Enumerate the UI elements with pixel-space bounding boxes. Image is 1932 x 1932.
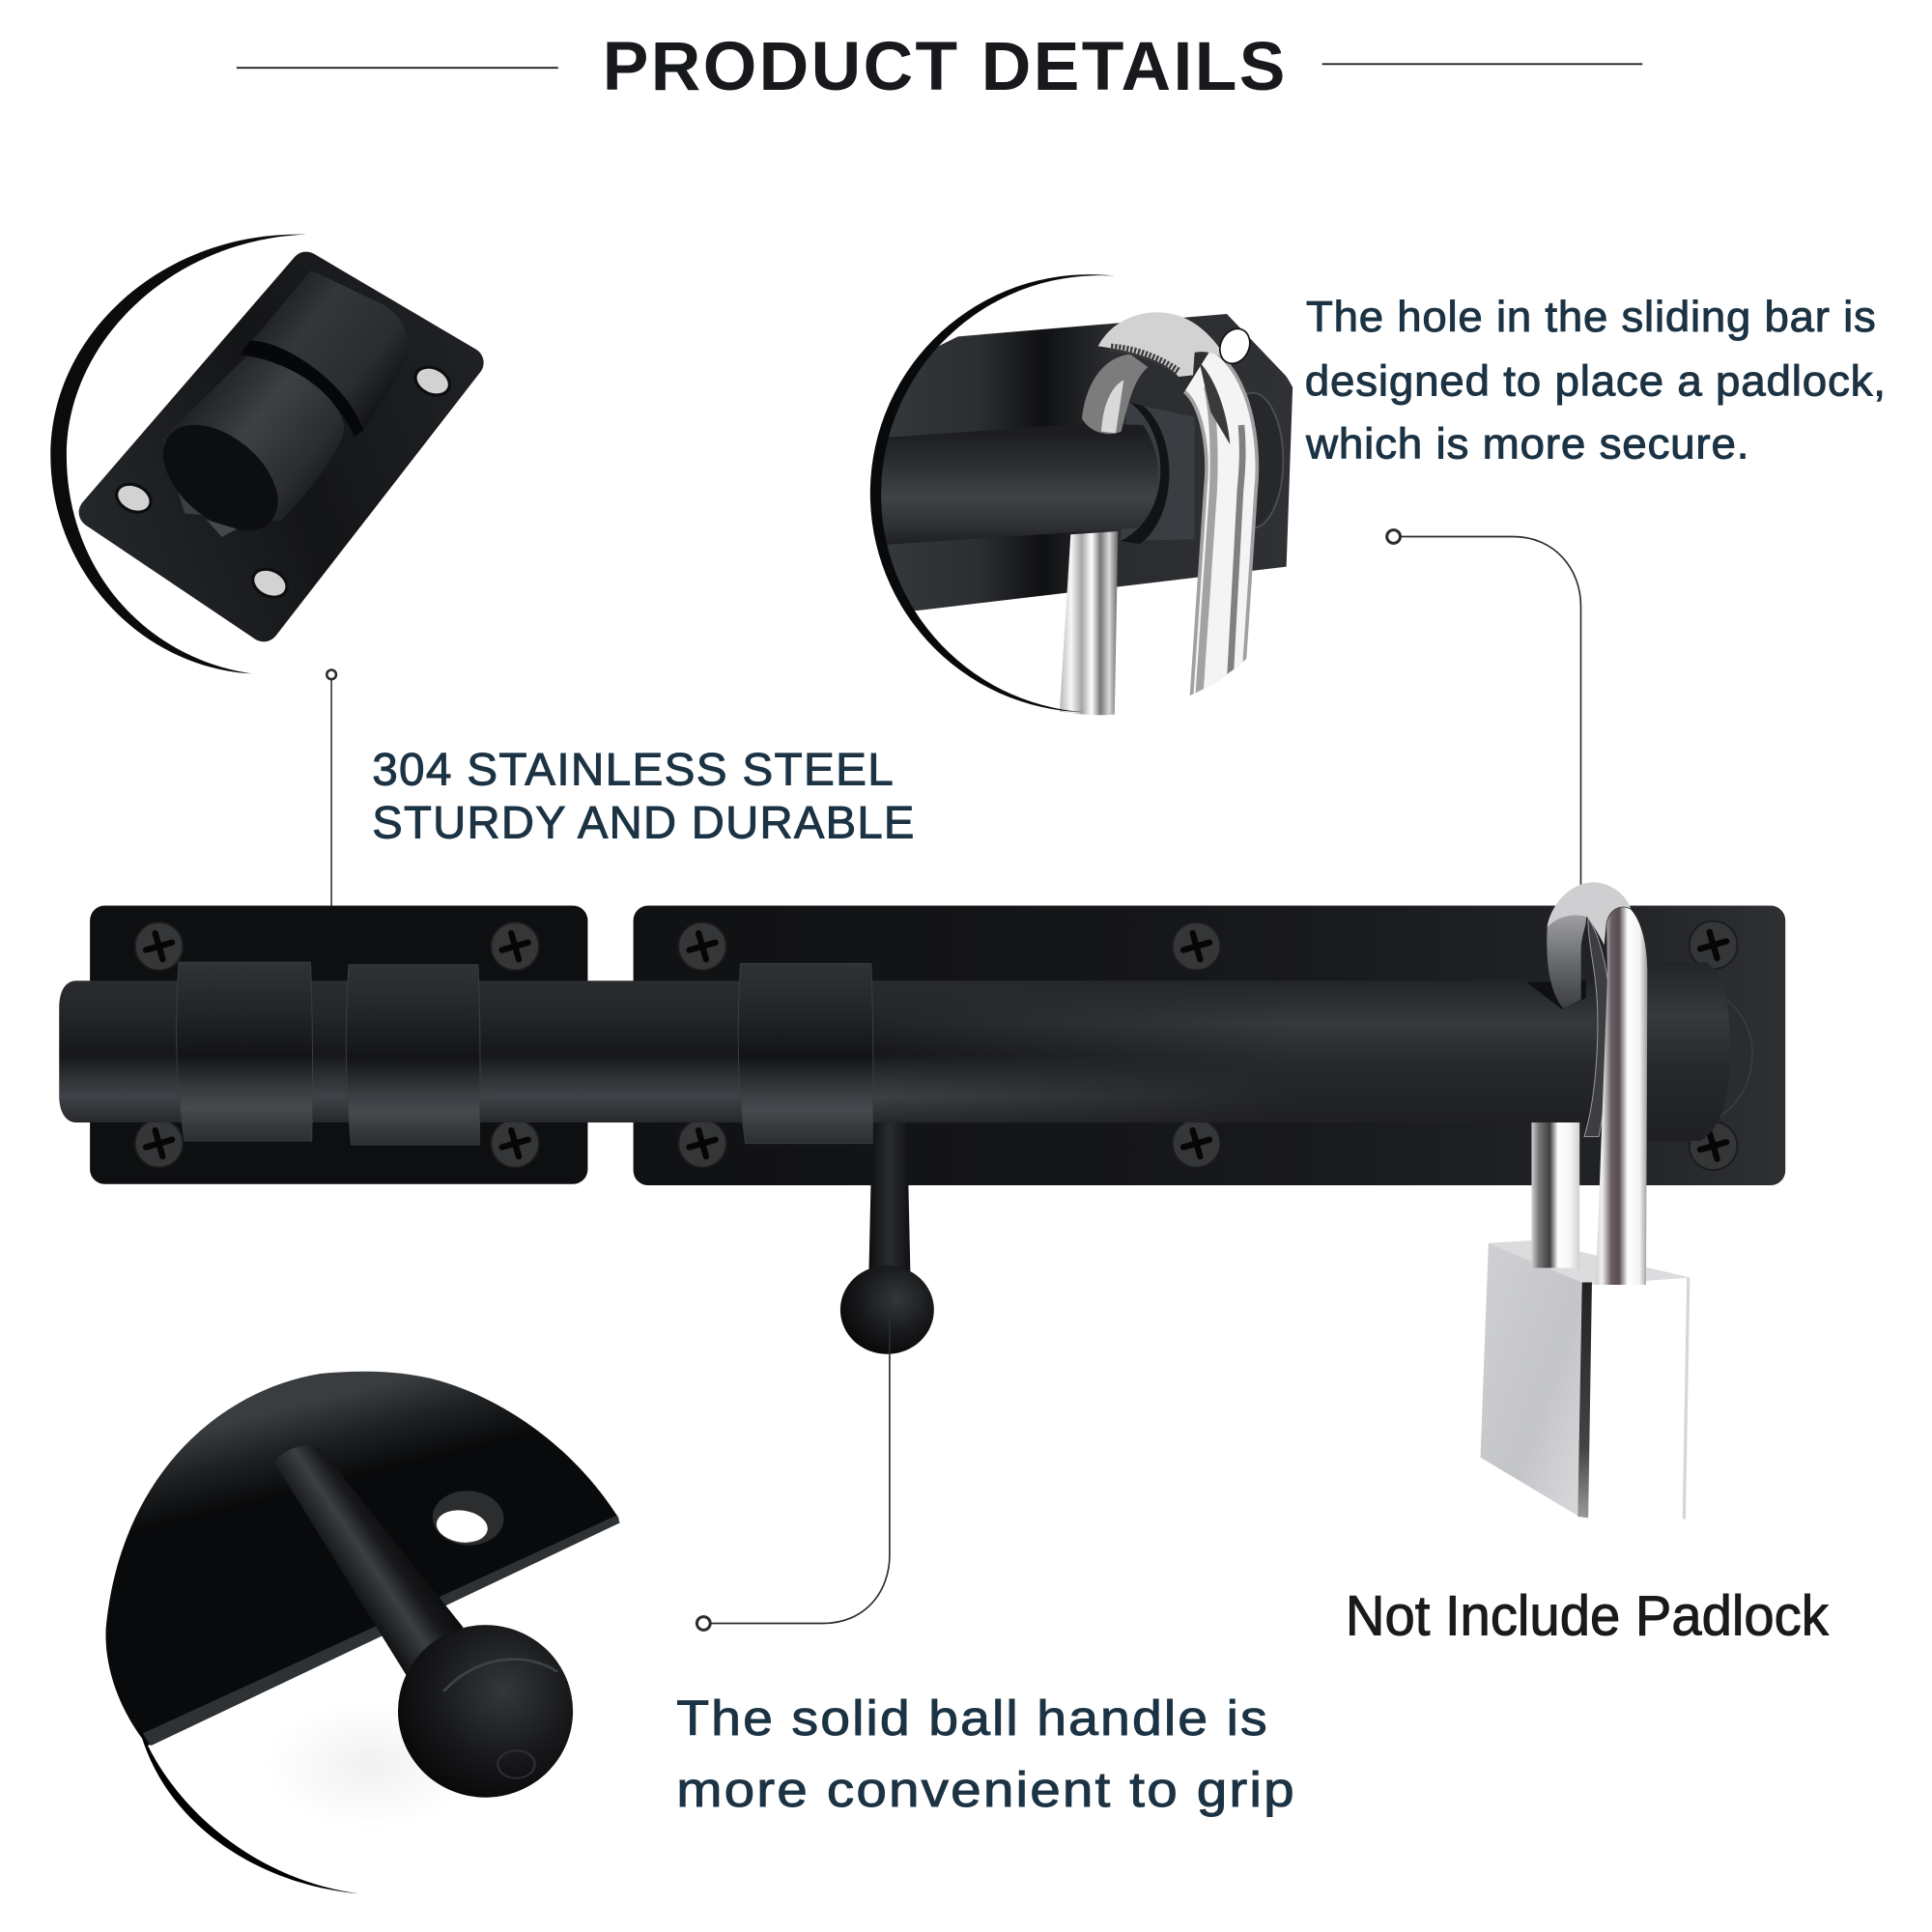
rear shackle leg: [1059, 531, 1119, 715]
mounting screws: [135, 921, 1737, 1170]
front leg: [1596, 907, 1647, 1285]
padlock top: [1489, 1240, 1690, 1285]
text: ball handle: more convenient to grip: [676, 1762, 1296, 1817]
detail plate: [857, 314, 1293, 615]
rear arm: [1547, 910, 1586, 1009]
handle stem: [868, 1115, 911, 1282]
arch top: [1548, 882, 1631, 945]
rod bracket 2: [346, 965, 480, 1145]
panel: strike plate detail circle: [50, 235, 469, 673]
upper barrel: [249, 270, 408, 431]
leg shadow: [1200, 362, 1230, 444]
padlock left face: [1481, 1243, 1582, 1517]
barrel end cap: [143, 404, 298, 552]
text: ball handle: [676, 1690, 1296, 1817]
crescent ring: [50, 235, 306, 673]
padlock dark edge: [1577, 1283, 1592, 1518]
rear shackle arm: [1082, 355, 1148, 434]
shackle arch band: [1098, 312, 1227, 377]
label: not include padlock: Not Include Padlock: [1346, 1585, 1829, 1648]
rod bracket 3: [738, 963, 873, 1144]
connector: padlock: [1387, 530, 1580, 885]
panel: padlock detail circle: [881, 312, 1293, 715]
plate edge: [143, 1515, 620, 1746]
sliding rod: [59, 980, 1602, 1122]
connector: strike plate: [327, 669, 336, 985]
engraved marking: [1111, 348, 1179, 372]
text: padlock hole: which is more secure.: [1305, 420, 1749, 468]
connector: handle: [696, 1288, 890, 1630]
crescent tail: [138, 1726, 358, 1893]
text: padlock hole: The hole in the sliding bar is: [1306, 294, 1877, 341]
main slide latch: [59, 906, 1785, 1354]
padlock body: [1481, 1240, 1690, 1519]
text: ball handle: The solid ball handle is: [676, 1690, 1269, 1746]
inner strip: [1584, 918, 1610, 1137]
screw holes: [112, 362, 454, 603]
right back plate: [634, 906, 1785, 1185]
padlock right edge: [1683, 1277, 1690, 1519]
text: padlock hole: designed to place a padlock,: [1305, 357, 1887, 405]
front shackle leg: [1196, 370, 1242, 741]
text: padlock hole: [1305, 294, 1887, 468]
soft shadow: [265, 1701, 474, 1830]
panel: ball handle detail circle: [105, 1372, 620, 1893]
circular plate: [105, 1372, 619, 1746]
plate hole: [1219, 327, 1251, 365]
rear leg: [1531, 1122, 1579, 1267]
sliding rod: [869, 423, 1158, 546]
padlock shackle: [1526, 882, 1647, 1285]
rod end collar: [1602, 962, 1730, 1141]
plate hole: [425, 1485, 512, 1551]
rod bracket 1: [177, 962, 313, 1141]
text: stainless steel: STURDY AND DURABLE: [372, 797, 916, 848]
left strike plate: [90, 906, 587, 1184]
barrel slot: [241, 341, 363, 437]
handle ball: [840, 1265, 934, 1354]
heading: product details: PRODUCT DETAILS: [603, 28, 1285, 105]
text: stainless steel: 304 STAINLESS STEEL: [372, 744, 895, 795]
stem: [274, 1445, 464, 1676]
rod end nub: [1700, 985, 1752, 1127]
crescent ring: padlock circle: [870, 274, 1115, 712]
ball: [398, 1625, 573, 1798]
text: stainless steel: [372, 744, 916, 848]
mounting plate: [95, 268, 469, 626]
shackle hole: [1526, 980, 1586, 1009]
rod end nub: [1246, 392, 1285, 529]
collar: [1121, 403, 1195, 541]
bolt shadow: [207, 520, 238, 537]
lower barrel: [161, 356, 344, 521]
